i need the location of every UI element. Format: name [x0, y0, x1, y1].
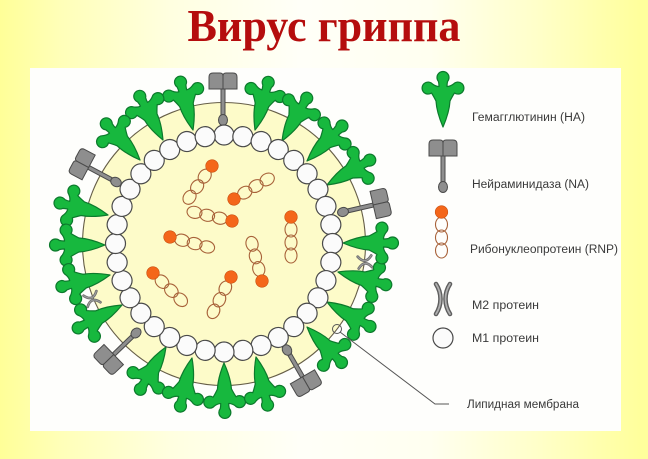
- callout: lipid membrane leader line: [332, 324, 449, 404]
- legend: hemagglutinin: [422, 72, 585, 127]
- neuraminidase spikes: [68, 73, 392, 398]
- legend: lipid membrane: Липидная мембрана: [467, 399, 580, 411]
- legend: M1 protein: [433, 328, 539, 348]
- legend: neuraminidase: Нейраминидаза (NA): [472, 179, 589, 191]
- legend: M2 protein: М2 протеин: [472, 300, 539, 312]
- legend: M2 protein: [436, 284, 539, 314]
- legend: neuraminidase: [429, 140, 589, 192]
- legend: hemagglutinin: Гемагглютинин (НА): [472, 112, 585, 124]
- title: Вирус гриппа: [188, 1, 460, 51]
- ribonucleoprotein strands: [144, 157, 297, 321]
- legend: M1 protein: М1 протеин: [472, 333, 539, 345]
- hemagglutinin spikes: [49, 71, 398, 419]
- legend: ribonucleoprotein: [435, 206, 618, 258]
- M2 proteins in membrane: [84, 255, 372, 307]
- legend: ribonucleoprotein: Рибонуклеопротеин (RNP): [470, 244, 618, 256]
- virus diagram: [49, 71, 398, 419]
- panel: white diagram background: [30, 68, 621, 431]
- legend: [422, 72, 618, 411]
- M1 protein ring: [106, 125, 342, 362]
- lipid membrane: [82, 102, 366, 386]
